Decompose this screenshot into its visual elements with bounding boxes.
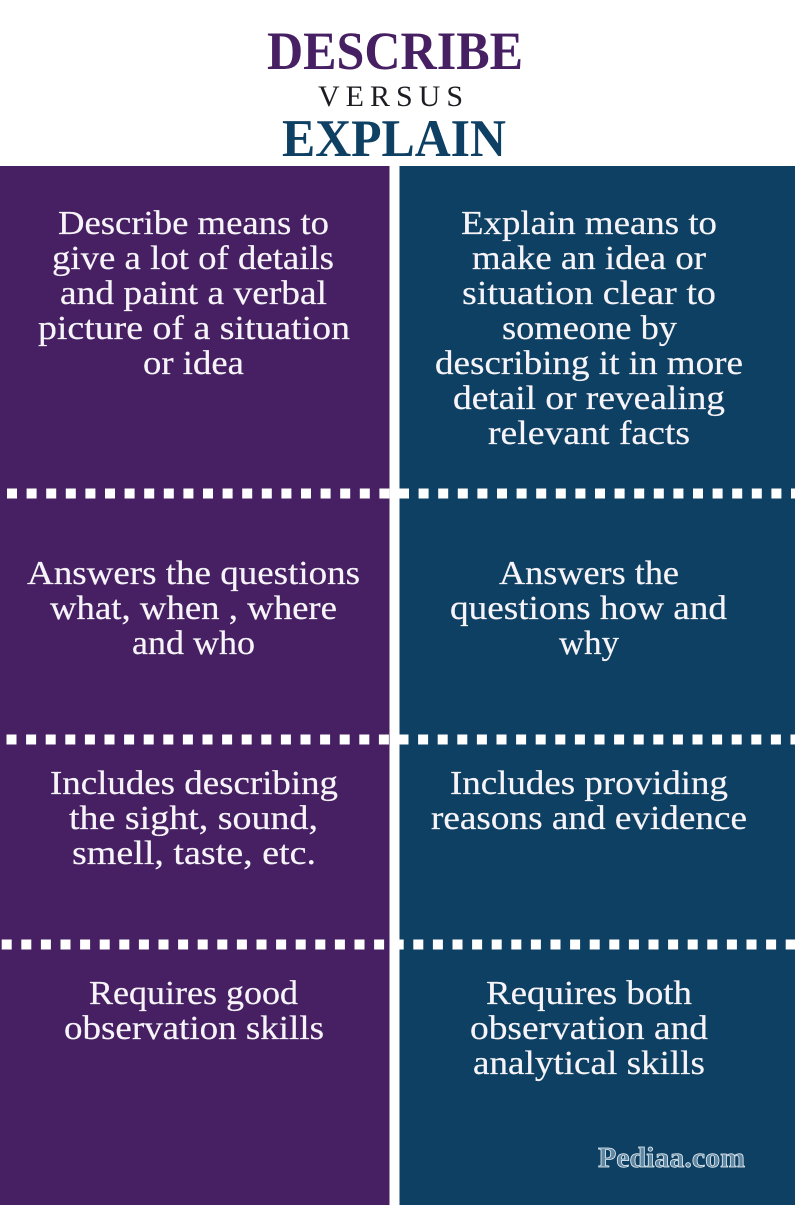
- text: explain definition: [435, 205, 743, 452]
- text: explain definition: describing it in more: [435, 345, 743, 382]
- text: explain definition: situation clear to: [462, 275, 716, 312]
- divider: dotted row 1: [7, 488, 795, 498]
- text: describe senses: smell, taste, etc.: [72, 835, 316, 872]
- text: describe skills: observation skills: [64, 1010, 324, 1047]
- text: explain definition: Explain means to: [461, 205, 717, 242]
- text: describe definition: give a lot of details: [52, 240, 334, 277]
- title block: [267, 21, 523, 168]
- text: describe questions: what, when , where: [50, 590, 337, 627]
- text: describe questions: and who: [132, 625, 255, 662]
- text: describe questions: Answers the questions: [27, 555, 360, 592]
- text: describe senses: the sight, sound,: [69, 800, 318, 837]
- text: explain questions: why: [559, 625, 619, 662]
- text: explain reasons: reasons and evidence: [431, 800, 747, 837]
- text: explain skills: observation and: [470, 1010, 708, 1047]
- text: describe senses: [50, 765, 338, 872]
- text: explain definition: relevant facts: [488, 415, 690, 452]
- text: describe definition: or idea: [143, 345, 244, 382]
- heading: explain: EXPLAIN: [282, 110, 506, 168]
- text: explain skills: Requires both: [486, 975, 692, 1012]
- text: describe senses: Includes describing: [50, 765, 338, 802]
- divider: dotted row 3: [2, 940, 795, 950]
- text: explain reasons: Includes providing: [450, 765, 728, 802]
- heading: versus: VERSUS: [318, 80, 463, 113]
- divider: dotted row 2: [6, 734, 795, 744]
- panel: explain column background: [400, 166, 795, 1205]
- text: explain questions: questions how and: [450, 590, 727, 627]
- text: describe definition: Describe means to: [58, 205, 329, 242]
- text: describe definition: picture of a situation: [38, 310, 350, 347]
- text: explain questions: Answers the: [499, 555, 679, 592]
- text: describe definition: [38, 205, 350, 382]
- text: explain skills: [470, 975, 708, 1082]
- text: describe skills: Requires good: [89, 975, 298, 1012]
- text: describe definition: and paint a verbal: [60, 275, 327, 312]
- text: explain questions: [450, 555, 727, 662]
- text: describe questions: [27, 555, 360, 662]
- panel: describe column background: [0, 166, 390, 1205]
- text: explain definition: make an idea or: [472, 240, 707, 277]
- text: explain definition: someone by: [502, 310, 677, 347]
- text: explain reasons: [431, 765, 747, 837]
- heading: describe: DESCRIBE: [267, 21, 523, 81]
- text: describe skills: [64, 975, 324, 1047]
- text: explain skills: analytical skills: [473, 1045, 705, 1082]
- logo: pediaa.com: Pediaa.com: [598, 1143, 745, 1174]
- text: explain definition: detail or revealing: [453, 380, 725, 417]
